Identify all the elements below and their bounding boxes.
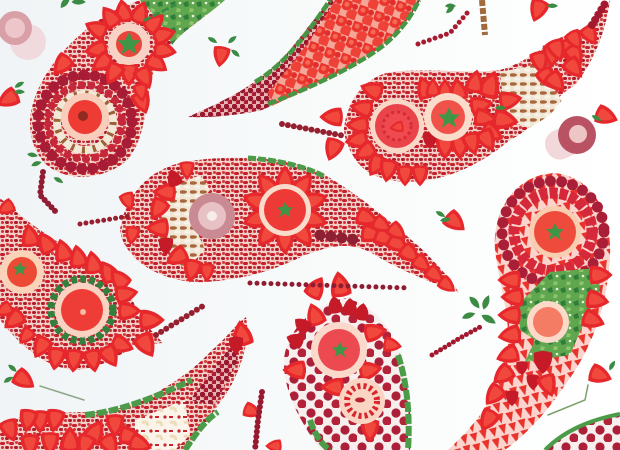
stem — [282, 124, 345, 136]
outer strawberries — [0, 197, 165, 374]
panel: left paisley — [0, 197, 203, 374]
berry ring — [38, 75, 132, 169]
stem — [250, 283, 410, 288]
panel: bottom-left paisley — [0, 317, 254, 450]
green edge — [310, 355, 409, 450]
panel: centre paisley — [80, 158, 460, 297]
panel: top-left paisley — [30, 0, 225, 177]
panel: right paisley — [448, 173, 613, 450]
glass right — [540, 116, 596, 164]
glass top-left — [0, 11, 46, 60]
grapefruit right — [424, 93, 472, 141]
green edges — [255, 0, 419, 104]
green top edge — [248, 158, 325, 177]
green tail — [140, 0, 225, 45]
almond panel — [160, 175, 210, 270]
patterned slice — [339, 378, 385, 424]
grapefruit with star strawberries — [240, 165, 330, 255]
grapefruit — [61, 93, 109, 141]
nuts — [135, 400, 190, 450]
berry tail tip — [592, 2, 606, 25]
green ring — [51, 279, 113, 341]
grapefruit small — [0, 250, 44, 294]
strawberries — [282, 270, 403, 443]
berry ring — [502, 181, 604, 283]
panel: top middle paisley — [188, 0, 420, 117]
tail strawberries — [354, 206, 460, 297]
berries — [190, 345, 238, 405]
panel: bottom-right paisley — [545, 414, 620, 450]
grapefruit top — [529, 206, 581, 258]
almonds — [500, 65, 562, 128]
grapefruit small — [527, 301, 569, 343]
grapefruit — [311, 322, 367, 378]
upper grapefruit with strawberries — [81, 0, 179, 93]
green edge — [85, 380, 218, 450]
glass slice — [189, 193, 235, 239]
grapefruit left — [370, 99, 424, 153]
panel: top-right paisley — [282, 0, 610, 186]
strawberries — [343, 22, 603, 186]
panel: bottom-centre paisley — [250, 270, 411, 450]
strawberries — [0, 408, 155, 450]
strawberries left — [118, 161, 214, 284]
lower strawberries — [474, 266, 613, 436]
grapefruit big — [55, 283, 109, 337]
stem — [156, 306, 203, 335]
green cluster — [518, 268, 600, 362]
stem — [80, 216, 130, 224]
icon: clover leaves — [27, 0, 498, 326]
almond ring — [57, 94, 113, 150]
